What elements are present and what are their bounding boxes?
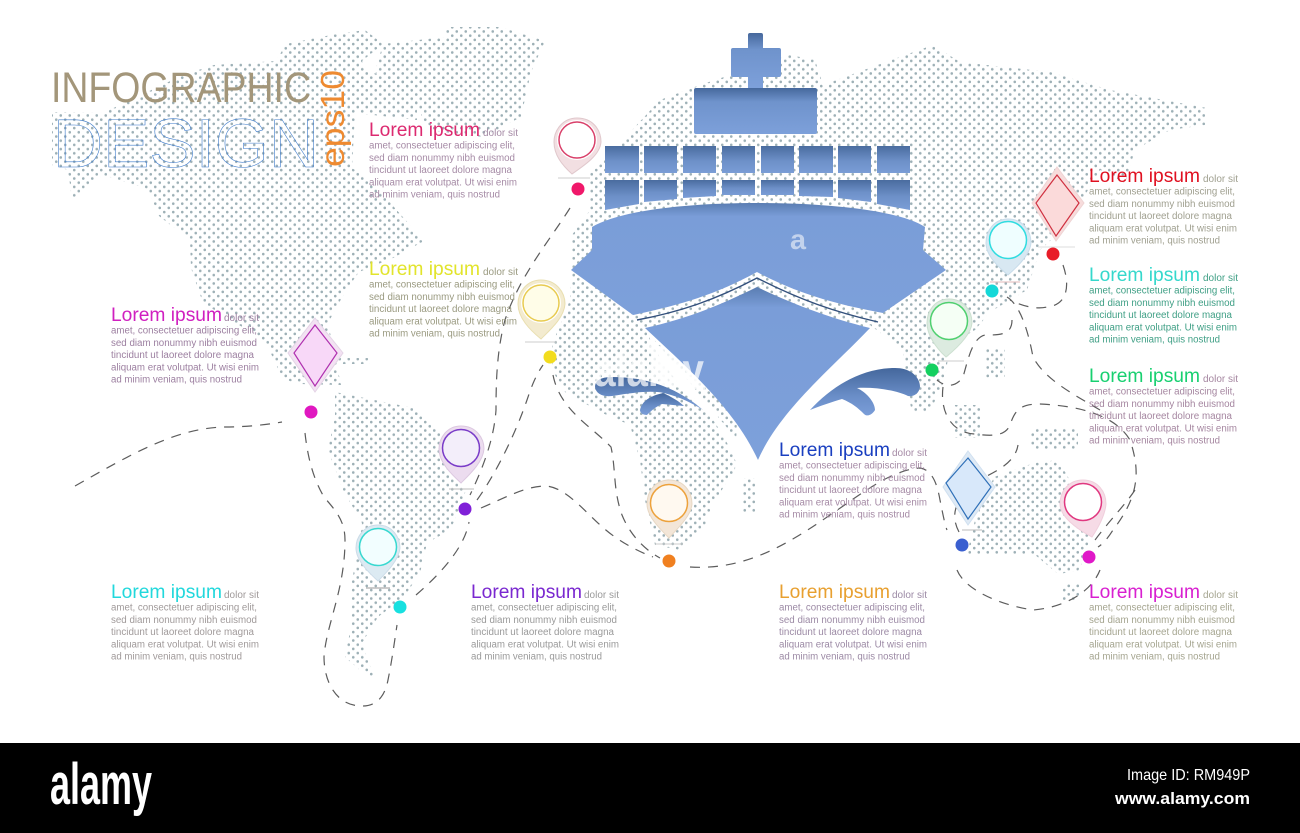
text block: red: tincidunt ut laoreet dolore magna bbox=[1089, 211, 1232, 222]
text block: orange: Lorem ipsum bbox=[779, 582, 890, 603]
text block: cyan left: sed diam nonummy nibh euismod bbox=[111, 615, 257, 626]
text block: magenta right bbox=[1089, 582, 1238, 663]
text block: orange: aliquam erat volutpat. Ut wisi enim bbox=[779, 639, 927, 650]
text block: yellow: aliquam erat volutpat. Ut wisi enim bbox=[369, 316, 517, 327]
text block: red: Lorem ipsum bbox=[1089, 166, 1200, 187]
text block: blue: amet, consectetuer adipiscing elit, bbox=[779, 460, 925, 472]
container rows bbox=[605, 146, 910, 210]
islands: South-East Asia bbox=[953, 348, 1078, 450]
text block: blue bbox=[779, 440, 927, 521]
white swoosh beside the bow bbox=[646, 330, 758, 472]
text block: blue: dolor sit bbox=[892, 448, 927, 459]
text block: green: sed diam nonummy nibh euismod bbox=[1089, 399, 1235, 410]
text block: purple bbox=[471, 582, 619, 663]
text block: cyan left: Lorem ipsum bbox=[111, 582, 222, 603]
text block: cyan right: tincidunt ut laoreet dolore magna bbox=[1089, 310, 1232, 321]
islands: Madagascar bbox=[742, 478, 756, 512]
text block: magenta right: sed diam nonummy nibh euismod bbox=[1089, 615, 1235, 626]
continent: South America bbox=[328, 392, 466, 677]
text block: cyan left: ad minim veniam, quis nostrud bbox=[111, 652, 242, 663]
pin: yellow bbox=[518, 280, 565, 364]
text block: cyan right bbox=[1089, 265, 1238, 346]
dashed shipping routes bbox=[75, 208, 1136, 706]
text block: green: amet, consectetuer adipiscing elit, bbox=[1089, 386, 1235, 398]
image id: Image ID: RM949P bbox=[1127, 767, 1250, 784]
text block: cyan left: aliquam erat volutpat. Ut wisi enim bbox=[111, 639, 259, 650]
pin: magenta diamond bbox=[288, 318, 343, 418]
continent: Eurasia and Africa bbox=[552, 45, 1207, 550]
text block: red: amet, consectetuer adipiscing elit, bbox=[1089, 186, 1235, 198]
text block: blue: tincidunt ut laoreet dolore magna bbox=[779, 485, 922, 496]
website: www.alamy.com bbox=[1114, 789, 1250, 808]
text block: green: Lorem ipsum bbox=[1089, 366, 1200, 387]
text block: crimson: tincidunt ut laoreet dolore magna bbox=[369, 165, 512, 176]
text block: blue: ad minim veniam, quis nostrud bbox=[779, 510, 910, 521]
continent: North America bbox=[52, 30, 424, 385]
title bbox=[51, 64, 351, 182]
text block: yellow: sed diam nonummy nibh euismod bbox=[369, 292, 515, 303]
text block: crimson: Lorem ipsum bbox=[369, 120, 480, 141]
text block: blue: Lorem ipsum bbox=[779, 440, 890, 461]
funnel cross bbox=[731, 33, 781, 88]
text block: crimson: sed diam nonummy nibh euismod bbox=[369, 153, 515, 164]
cruise ship illustration bbox=[571, 33, 946, 460]
pin: orange bbox=[647, 480, 692, 568]
text block: cyan left: dolor sit bbox=[224, 590, 259, 601]
left waves bbox=[595, 377, 703, 410]
pin: pink right bbox=[1060, 480, 1106, 564]
pin: cyan lower bbox=[356, 525, 406, 614]
dotted world map bbox=[52, 27, 1207, 677]
pin: purple bbox=[439, 426, 484, 516]
text block: orange: tincidunt ut laoreet dolore magna bbox=[779, 627, 922, 638]
text block: purple: Lorem ipsum bbox=[471, 582, 582, 603]
pin: cyan top bbox=[986, 219, 1031, 298]
text block: magenta right: dolor sit bbox=[1203, 590, 1238, 601]
text block: green: aliquam erat volutpat. Ut wisi enim bbox=[1089, 423, 1237, 434]
text block: cyan left bbox=[111, 582, 259, 663]
text block: yellow: dolor sit bbox=[483, 267, 518, 278]
text block: green bbox=[1089, 366, 1238, 447]
text block: red bbox=[1089, 166, 1238, 247]
text block: crimson bbox=[369, 120, 518, 201]
text block: magenta: Lorem ipsum bbox=[111, 305, 222, 326]
text block: yellow: Lorem ipsum bbox=[369, 259, 480, 280]
text block: orange: dolor sit bbox=[892, 590, 927, 601]
text block: magenta bbox=[111, 305, 259, 386]
text block: green: tincidunt ut laoreet dolore magna bbox=[1089, 411, 1232, 422]
footer band bbox=[0, 743, 1300, 833]
continent: Greenland bbox=[375, 27, 545, 137]
pin: green bbox=[926, 299, 972, 376]
text block: orange: amet, consectetuer adipiscing elit, bbox=[779, 602, 925, 614]
text block: blue: sed diam nonummy nibh euismod bbox=[779, 473, 925, 484]
text block: yellow: amet, consectetuer adipiscing elit, bbox=[369, 280, 515, 290]
footer logo: alamy bbox=[50, 752, 152, 817]
text block: green: ad minim veniam, quis nostrud bbox=[1089, 436, 1220, 447]
watermark on ship bbox=[594, 224, 806, 396]
title tag: eps10: eps10 bbox=[314, 70, 351, 167]
watermark letter: a bbox=[790, 224, 806, 255]
continent: Australia bbox=[967, 460, 1091, 574]
watermark word: alamy bbox=[594, 344, 704, 396]
text block: cyan right: Lorem ipsum bbox=[1089, 265, 1200, 286]
text block: crimson: amet, consectetuer adipiscing elit, bbox=[369, 140, 515, 152]
pin: blue diamond bbox=[943, 451, 995, 552]
superstructure block bbox=[694, 88, 817, 134]
text block: red: dolor sit bbox=[1203, 174, 1238, 185]
text block: cyan right: amet, consectetuer adipiscing elit, bbox=[1089, 286, 1235, 296]
text block: yellow: ad minim veniam, quis nostrud bbox=[369, 329, 500, 340]
pin: pink top bbox=[554, 118, 601, 196]
text block: magenta: ad minim veniam, quis nostrud bbox=[111, 375, 242, 386]
text block: magenta: sed diam nonummy nibh euismod bbox=[111, 338, 257, 349]
text block: cyan right: ad minim veniam, quis nostrud bbox=[1089, 335, 1220, 346]
text block: red: sed diam nonummy nibh euismod bbox=[1089, 199, 1235, 210]
island: Tasmania bbox=[1062, 584, 1080, 600]
text block: cyan right: sed diam nonummy nibh euismod bbox=[1089, 298, 1235, 309]
text block: purple: dolor sit bbox=[584, 590, 619, 601]
text block: magenta right: aliquam erat volutpat. Ut wisi enim bbox=[1089, 639, 1237, 650]
text block: crimson: dolor sit bbox=[483, 128, 518, 139]
text block: purple: ad minim veniam, quis nostrud bbox=[471, 652, 602, 663]
title line: DESIGN: DESIGN bbox=[53, 105, 319, 182]
text block: magenta: amet, consectetuer adipiscing elit, bbox=[111, 326, 257, 336]
text block: purple: aliquam erat volutpat. Ut wisi enim bbox=[471, 639, 619, 650]
deck lines bbox=[637, 278, 878, 322]
islands: Caribbean bbox=[335, 358, 370, 364]
text block: cyan left: tincidunt ut laoreet dolore magna bbox=[111, 627, 254, 638]
text block: cyan right: aliquam erat volutpat. Ut wisi enim bbox=[1089, 322, 1237, 333]
text block: orange: sed diam nonummy nibh euismod bbox=[779, 615, 925, 626]
text block: yellow: tincidunt ut laoreet dolore magna bbox=[369, 304, 512, 315]
text block: orange bbox=[779, 582, 927, 663]
text block: blue: aliquam erat volutpat. Ut wisi enim bbox=[779, 497, 927, 508]
pin: red diamond bbox=[1032, 167, 1084, 260]
text block: magenta right: tincidunt ut laoreet dolore magna bbox=[1089, 627, 1232, 638]
upper hull bbox=[571, 203, 946, 315]
text block: red: aliquam erat volutpat. Ut wisi enim bbox=[1089, 223, 1237, 234]
text block: purple: tincidunt ut laoreet dolore magna bbox=[471, 627, 614, 638]
faded area behind watermark bbox=[648, 345, 705, 390]
text block: green: dolor sit bbox=[1203, 374, 1238, 385]
bow bbox=[645, 287, 870, 460]
text block: magenta right: Lorem ipsum bbox=[1089, 582, 1200, 603]
text block: magenta right: amet, consectetuer adipiscing elit, bbox=[1089, 602, 1235, 614]
text block: magenta right: ad minim veniam, quis nostrud bbox=[1089, 652, 1220, 663]
text block: magenta: dolor sit bbox=[224, 313, 259, 324]
text block: purple: amet, consectetuer adipiscing elit, bbox=[471, 602, 617, 614]
title line: INFOGRAPHIC: INFOGRAPHIC bbox=[51, 64, 311, 112]
text block: cyan right: dolor sit bbox=[1203, 273, 1238, 284]
right waves bbox=[810, 368, 920, 415]
text block: crimson: aliquam erat volutpat. Ut wisi enim bbox=[369, 177, 517, 188]
text block: purple: sed diam nonummy nibh euismod bbox=[471, 615, 617, 626]
text block: crimson: ad minim veniam, quis nostrud bbox=[369, 190, 500, 201]
text block: cyan left: amet, consectetuer adipiscing elit, bbox=[111, 602, 257, 614]
text block: magenta: tincidunt ut laoreet dolore magna bbox=[111, 350, 254, 361]
text block: orange: ad minim veniam, quis nostrud bbox=[779, 652, 910, 663]
text block: yellow bbox=[369, 259, 518, 340]
text block: red: ad minim veniam, quis nostrud bbox=[1089, 236, 1220, 247]
text block: magenta: aliquam erat volutpat. Ut wisi enim bbox=[111, 362, 259, 373]
